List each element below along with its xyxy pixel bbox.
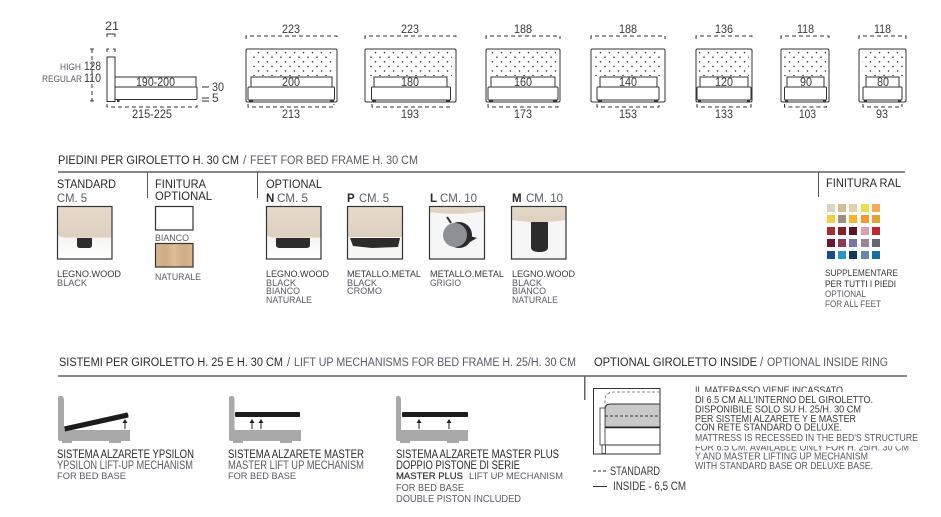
panel: finitura RAL: PER TUTTI I PIEDI <box>825 279 896 289</box>
panel: ypsilon mechanism: SISTEMA ALZARETE YPSILON <box>57 449 194 461</box>
panel: optional foot L: GRIGIO <box>430 278 461 288</box>
heading: lift up mechanisms: SISTEMI PER GIROLETTO H. 25 E H. 30 CM <box>59 357 283 369</box>
heading: feet for bed frame <box>58 155 418 167</box>
side view bed diagram: 190-200 <box>136 75 175 89</box>
front view bed 80: 118 <box>874 22 891 36</box>
icon: ypsilon bed <box>58 396 130 443</box>
panel: standard foot <box>57 179 121 288</box>
panel: master mechanism <box>228 396 364 481</box>
front view bed 90: 118 <box>797 22 814 36</box>
panel: optional foot P: CM. 5 <box>359 193 389 205</box>
panel: optional foot L: CM. 10 <box>440 193 477 205</box>
front view bed 80: 93 <box>876 107 888 121</box>
panel: optional foot L <box>429 193 504 288</box>
text block: inside ring description: DISPONIBILE SOLO SU H. 25/H. 30 CM <box>695 404 861 416</box>
side view bed diagram: 5 <box>212 91 219 105</box>
front view bed 200: 223 <box>282 22 300 36</box>
front view bed 120 <box>696 22 752 121</box>
icon: master bed <box>229 396 301 443</box>
front view bed 200: 213 <box>282 107 300 121</box>
panel: master plus mechanism: LIFT UP MECHANISM <box>469 471 563 481</box>
panel: optional foot M: LEGNO.WOOD <box>512 269 575 279</box>
panel: finitura RAL: FOR ALL FEET <box>825 299 881 309</box>
panel: optional foot M: BIANCO <box>512 286 546 296</box>
text block: inside ring description: CON RETE STANDARD O DELUXE. <box>695 422 842 434</box>
front view bed 140: 140 <box>619 75 637 89</box>
panel: standard foot: STANDARD <box>57 179 116 191</box>
front view bed 160: 188 <box>514 22 532 36</box>
panel: optional foot N: LEGNO.WOOD <box>266 269 329 279</box>
panel: optional foot M: M <box>512 193 522 205</box>
front view bed 80: 80 <box>877 75 889 89</box>
front view bed 200: 200 <box>282 75 300 89</box>
front view bed 90: 103 <box>799 107 816 121</box>
panel: finitura RAL: FINITURA RAL <box>826 178 902 190</box>
front view bed 140: 188 <box>619 22 637 36</box>
panel: master plus mechanism: SISTEMA ALZARETE MASTER PLUS <box>396 449 559 461</box>
front view bed 180: 223 <box>401 22 419 36</box>
text block: inside ring description: Y AND MASTER LIFTING UP MECHANISM <box>695 450 868 462</box>
front view bed 160: 173 <box>514 107 532 121</box>
legend: inside <box>593 481 686 493</box>
panel: optional foot N: NATURALE <box>266 295 312 305</box>
panel: master mechanism: MASTER LIFT UP MECHANISM <box>228 460 364 472</box>
colour swatches <box>827 204 880 259</box>
front view bed 160: 160 <box>514 75 532 89</box>
panel: finitura optional <box>155 179 213 282</box>
panel: optional foot P <box>347 193 421 296</box>
panel: optional foot N: OPTIONAL <box>266 179 323 191</box>
panel: optional foot P: CROMO <box>347 286 382 296</box>
panel: ypsilon mechanism: YPSILON LIFT-UP MECHANISM <box>57 460 193 472</box>
side view bed diagram: 128 <box>84 59 101 73</box>
text block: inside ring description: DI 6.5 CM ALL'INTERNO DEL GIROLETTO. <box>695 394 873 406</box>
front view bed 180 <box>365 22 456 121</box>
front view bed 80 <box>859 22 906 121</box>
panel: master plus mechanism: DOUBLE PISTON INCLUDED <box>396 494 521 505</box>
front view bed 90: 90 <box>800 75 812 89</box>
panel: ypsilon mechanism <box>57 396 194 481</box>
front view bed 180: 193 <box>401 107 419 121</box>
side view bed diagram: 110 <box>84 71 101 85</box>
panel: optional foot M: NATURALE <box>512 295 558 305</box>
panel: optional foot N: BLACK <box>266 278 296 288</box>
heading: optional inside ring: / <box>760 357 764 369</box>
panel: master mechanism: SISTEMA ALZARETE MASTER <box>228 449 364 461</box>
front view bed 120: 133 <box>715 107 733 121</box>
panel: optional foot P: METALLO.METAL <box>347 269 421 279</box>
panel: optional foot N <box>266 179 329 305</box>
diagram: inside ring section <box>594 388 660 454</box>
panel: master mechanism: FOR BED BASE <box>228 471 296 481</box>
panel: optional foot N: N <box>266 193 274 205</box>
panel: finitura optional: OPTIONAL <box>155 191 213 203</box>
panel: finitura RAL <box>825 178 902 309</box>
panel: optional foot P: P <box>347 193 355 205</box>
side view bed diagram: 30 <box>212 80 224 94</box>
panel: optional foot L: METALLO.METAL <box>430 269 504 279</box>
legend: inside: INSIDE - 6,5 CM <box>613 481 686 493</box>
panel: ypsilon mechanism: FOR BED BASE <box>57 471 126 481</box>
legend: standard: STANDARD <box>610 466 660 478</box>
text block: inside ring description <box>690 384 925 472</box>
side view bed diagram: 215-225 <box>132 107 172 121</box>
heading: lift up mechanisms: / <box>287 357 291 369</box>
front view bed 140: 153 <box>619 107 637 121</box>
heading: optional inside ring: OPTIONAL GIROLETTO INSIDE <box>594 357 757 369</box>
panel: standard foot: LEGNO.WOOD <box>57 269 121 279</box>
heading: optional inside ring: OPTIONAL INSIDE RING <box>767 357 888 369</box>
panel: optional foot M: CM. 10 <box>526 193 563 205</box>
panel: optional foot L: L <box>430 193 437 205</box>
front view bed 160 <box>486 22 560 121</box>
front view bed 180: 180 <box>401 75 419 89</box>
front view bed 200 <box>246 22 337 121</box>
side view bed diagram: 21 <box>105 19 119 33</box>
side view bed diagram: REGULAR <box>42 74 82 84</box>
heading: feet for bed frame: FEET FOR BED FRAME H. 30 CM <box>250 155 418 167</box>
legend: standard <box>593 466 660 478</box>
panel: standard foot: BLACK <box>57 278 87 288</box>
panel: finitura optional: BIANCO <box>155 233 189 243</box>
front view bed 120: 120 <box>715 75 733 89</box>
side view bed diagram: HIGH <box>60 62 81 72</box>
text block: inside ring description: IL MATERASSO VIENE INCASSATO <box>695 384 843 396</box>
text block: inside ring description: FOR 6.5 CM. AVAILABLE ONLY FOR H. 25/H. 30 CM <box>695 442 909 454</box>
front view bed 90 <box>781 22 829 121</box>
icon: master plus bed <box>396 396 468 443</box>
panel: master plus mechanism: DOPPIO PISTONE DI SERIE <box>396 460 520 472</box>
heading: optional inside ring <box>594 357 888 369</box>
panel: finitura RAL: SUPPLEMENTARE <box>825 268 898 278</box>
panel: finitura RAL: OPTIONAL <box>825 289 866 299</box>
side view bed diagram <box>42 19 224 121</box>
front view bed 120: 136 <box>715 22 733 36</box>
panel: finitura optional: NATURALE <box>155 272 201 282</box>
panel: master plus mechanism: MASTER PLUS <box>396 471 463 481</box>
text block: inside ring description: WITH STANDARD BASE OR DELUXE BASE. <box>695 460 873 472</box>
heading: feet for bed frame: / <box>243 155 247 167</box>
front view bed 140 <box>591 22 665 121</box>
panel: optional foot N: CM. 5 <box>277 193 308 205</box>
panel: optional foot M: BLACK <box>512 278 542 288</box>
panel: master plus mechanism <box>396 396 563 505</box>
heading: lift up mechanisms: LIFT UP MECHANISMS FOR BED FRAME H. 25/H. 30 CM <box>294 357 576 369</box>
panel: master plus mechanism: FOR BED BASE <box>396 483 464 494</box>
panel: optional foot N: BIANCO <box>266 286 300 296</box>
panel: optional foot P: BLACK <box>347 278 377 288</box>
panel: optional foot M <box>511 193 575 305</box>
panel: standard foot: CM. 5 <box>57 193 87 205</box>
heading: lift up mechanisms <box>59 357 576 369</box>
panel: finitura optional: FINITURA <box>155 179 206 191</box>
heading: feet for bed frame: PIEDINI PER GIROLETTO H. 30 CM <box>58 155 239 167</box>
text block: inside ring description: PER SISTEMI ALZARETE Y E MASTER <box>695 413 856 425</box>
